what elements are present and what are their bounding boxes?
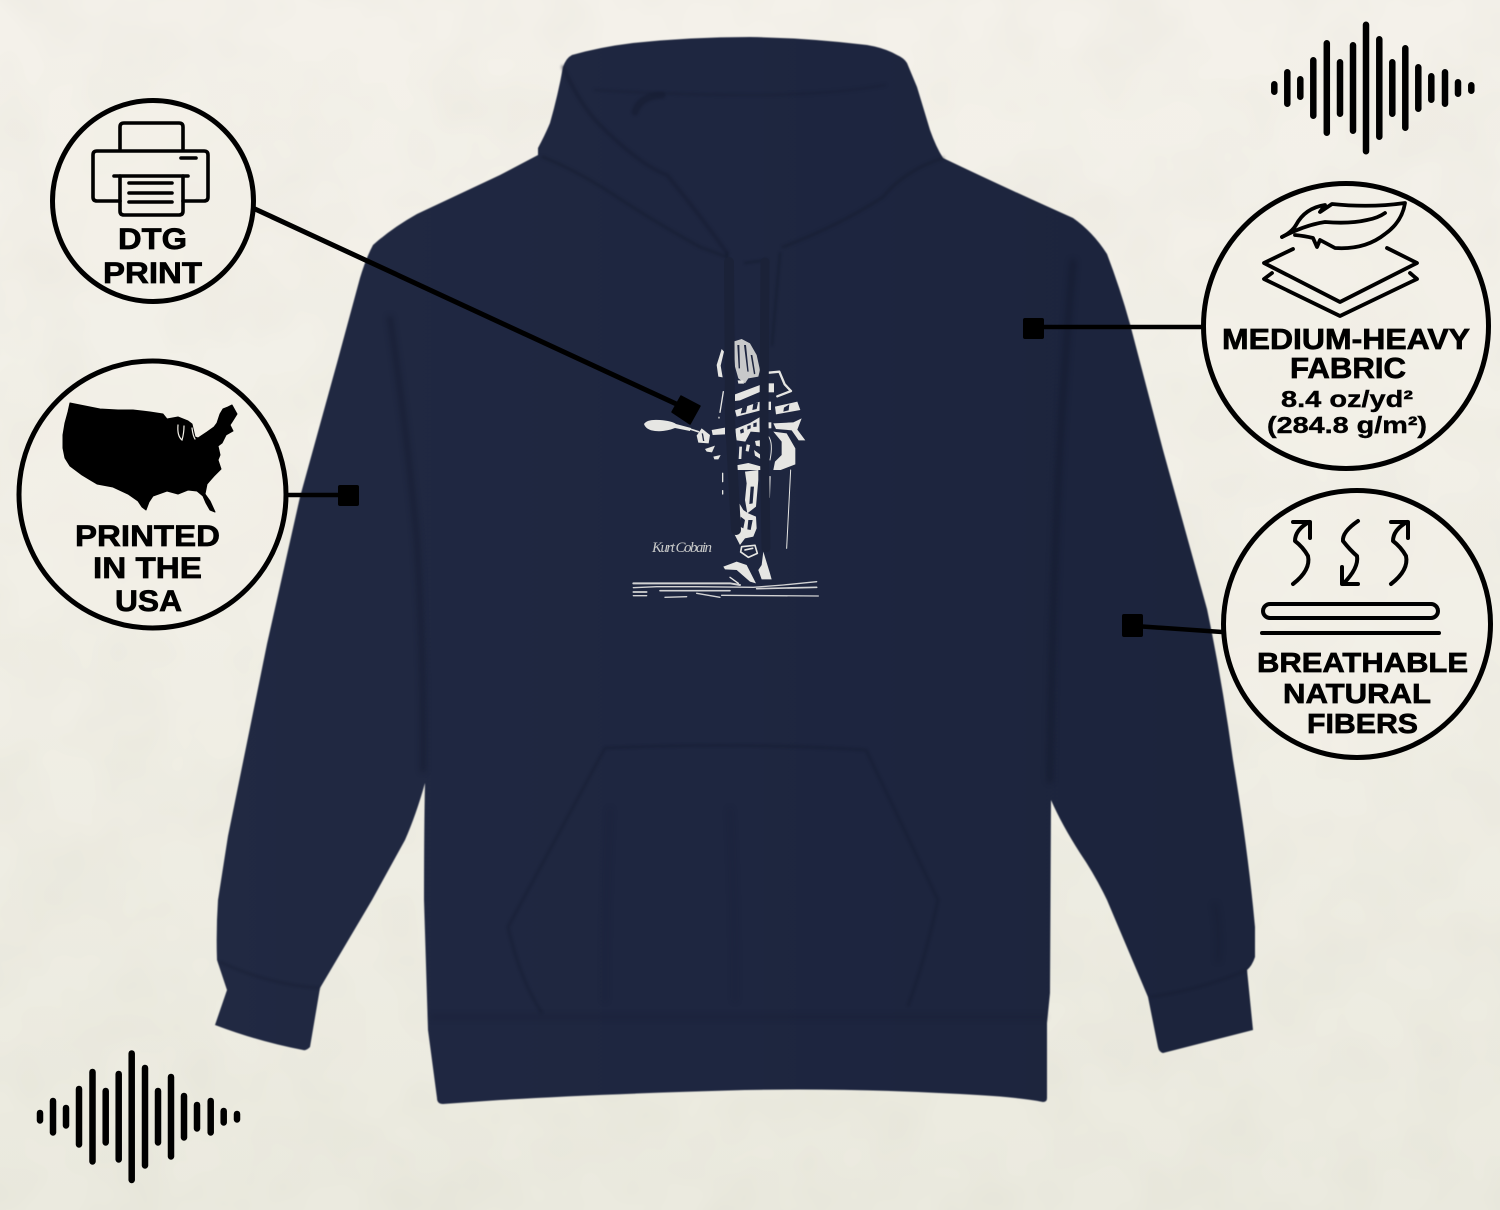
- hoodie silhouette: [215, 37, 1255, 1104]
- label: IN THE: [93, 552, 202, 585]
- label: PRINTED: [75, 520, 220, 553]
- label: BREATHABLE: [1257, 647, 1468, 678]
- drawstrings: [729, 262, 766, 548]
- connector: breathable fibers: [1122, 614, 1222, 637]
- artwork: guitarist line drawing, legs and stage: [633, 470, 818, 597]
- kangaroo pocket seams: [508, 745, 938, 1013]
- artwork: guitarist line drawing, upper body: [690, 339, 805, 470]
- hood folds: [543, 67, 943, 345]
- hoodie: [215, 37, 1255, 1104]
- label: FIBERS: [1307, 708, 1418, 739]
- callout: medium-heavy fabric: [1204, 184, 1488, 468]
- label: PRINT: [103, 257, 202, 290]
- signature: Kurt Cobain: [651, 540, 712, 556]
- label: FABRIC: [1290, 353, 1406, 385]
- label: USA: [115, 585, 182, 618]
- icon: airflow arrows over fabric: [1262, 521, 1439, 633]
- icon: USA map: [63, 403, 237, 512]
- label: NATURAL: [1283, 678, 1431, 709]
- callout: breathable natural fibers: [1224, 490, 1490, 758]
- connector: DTG print: [255, 209, 700, 424]
- label: DTG: [118, 223, 187, 256]
- hair: [733, 339, 760, 383]
- callout: printed in the USA: [19, 361, 286, 628]
- guitar hand and arm marks: [697, 428, 710, 443]
- callout: DTG print: [52, 100, 254, 302]
- stage lines: [633, 582, 818, 597]
- legs: [745, 470, 758, 513]
- sleeve seam shadows: [390, 262, 1219, 1017]
- label: 8.4 oz/yd²: [1281, 386, 1413, 412]
- icon: printer: [93, 123, 208, 215]
- sound wave: bottom left: [40, 1053, 237, 1180]
- artwork: guitar headstock: [644, 420, 691, 431]
- connector: printed in the USA: [289, 485, 359, 506]
- sound wave: top right: [1274, 25, 1471, 151]
- connector: medium-heavy fabric: [1023, 318, 1202, 339]
- cuff seams: [220, 962, 1247, 997]
- right shoulder and guitar body: [769, 372, 791, 396]
- sweater stripes: [735, 385, 761, 401]
- shoes: [723, 562, 756, 583]
- label: MEDIUM-HEAVY: [1222, 324, 1470, 356]
- icon: feather and fabric layers: [1264, 203, 1417, 316]
- label: (284.8 g/m²): [1267, 412, 1427, 438]
